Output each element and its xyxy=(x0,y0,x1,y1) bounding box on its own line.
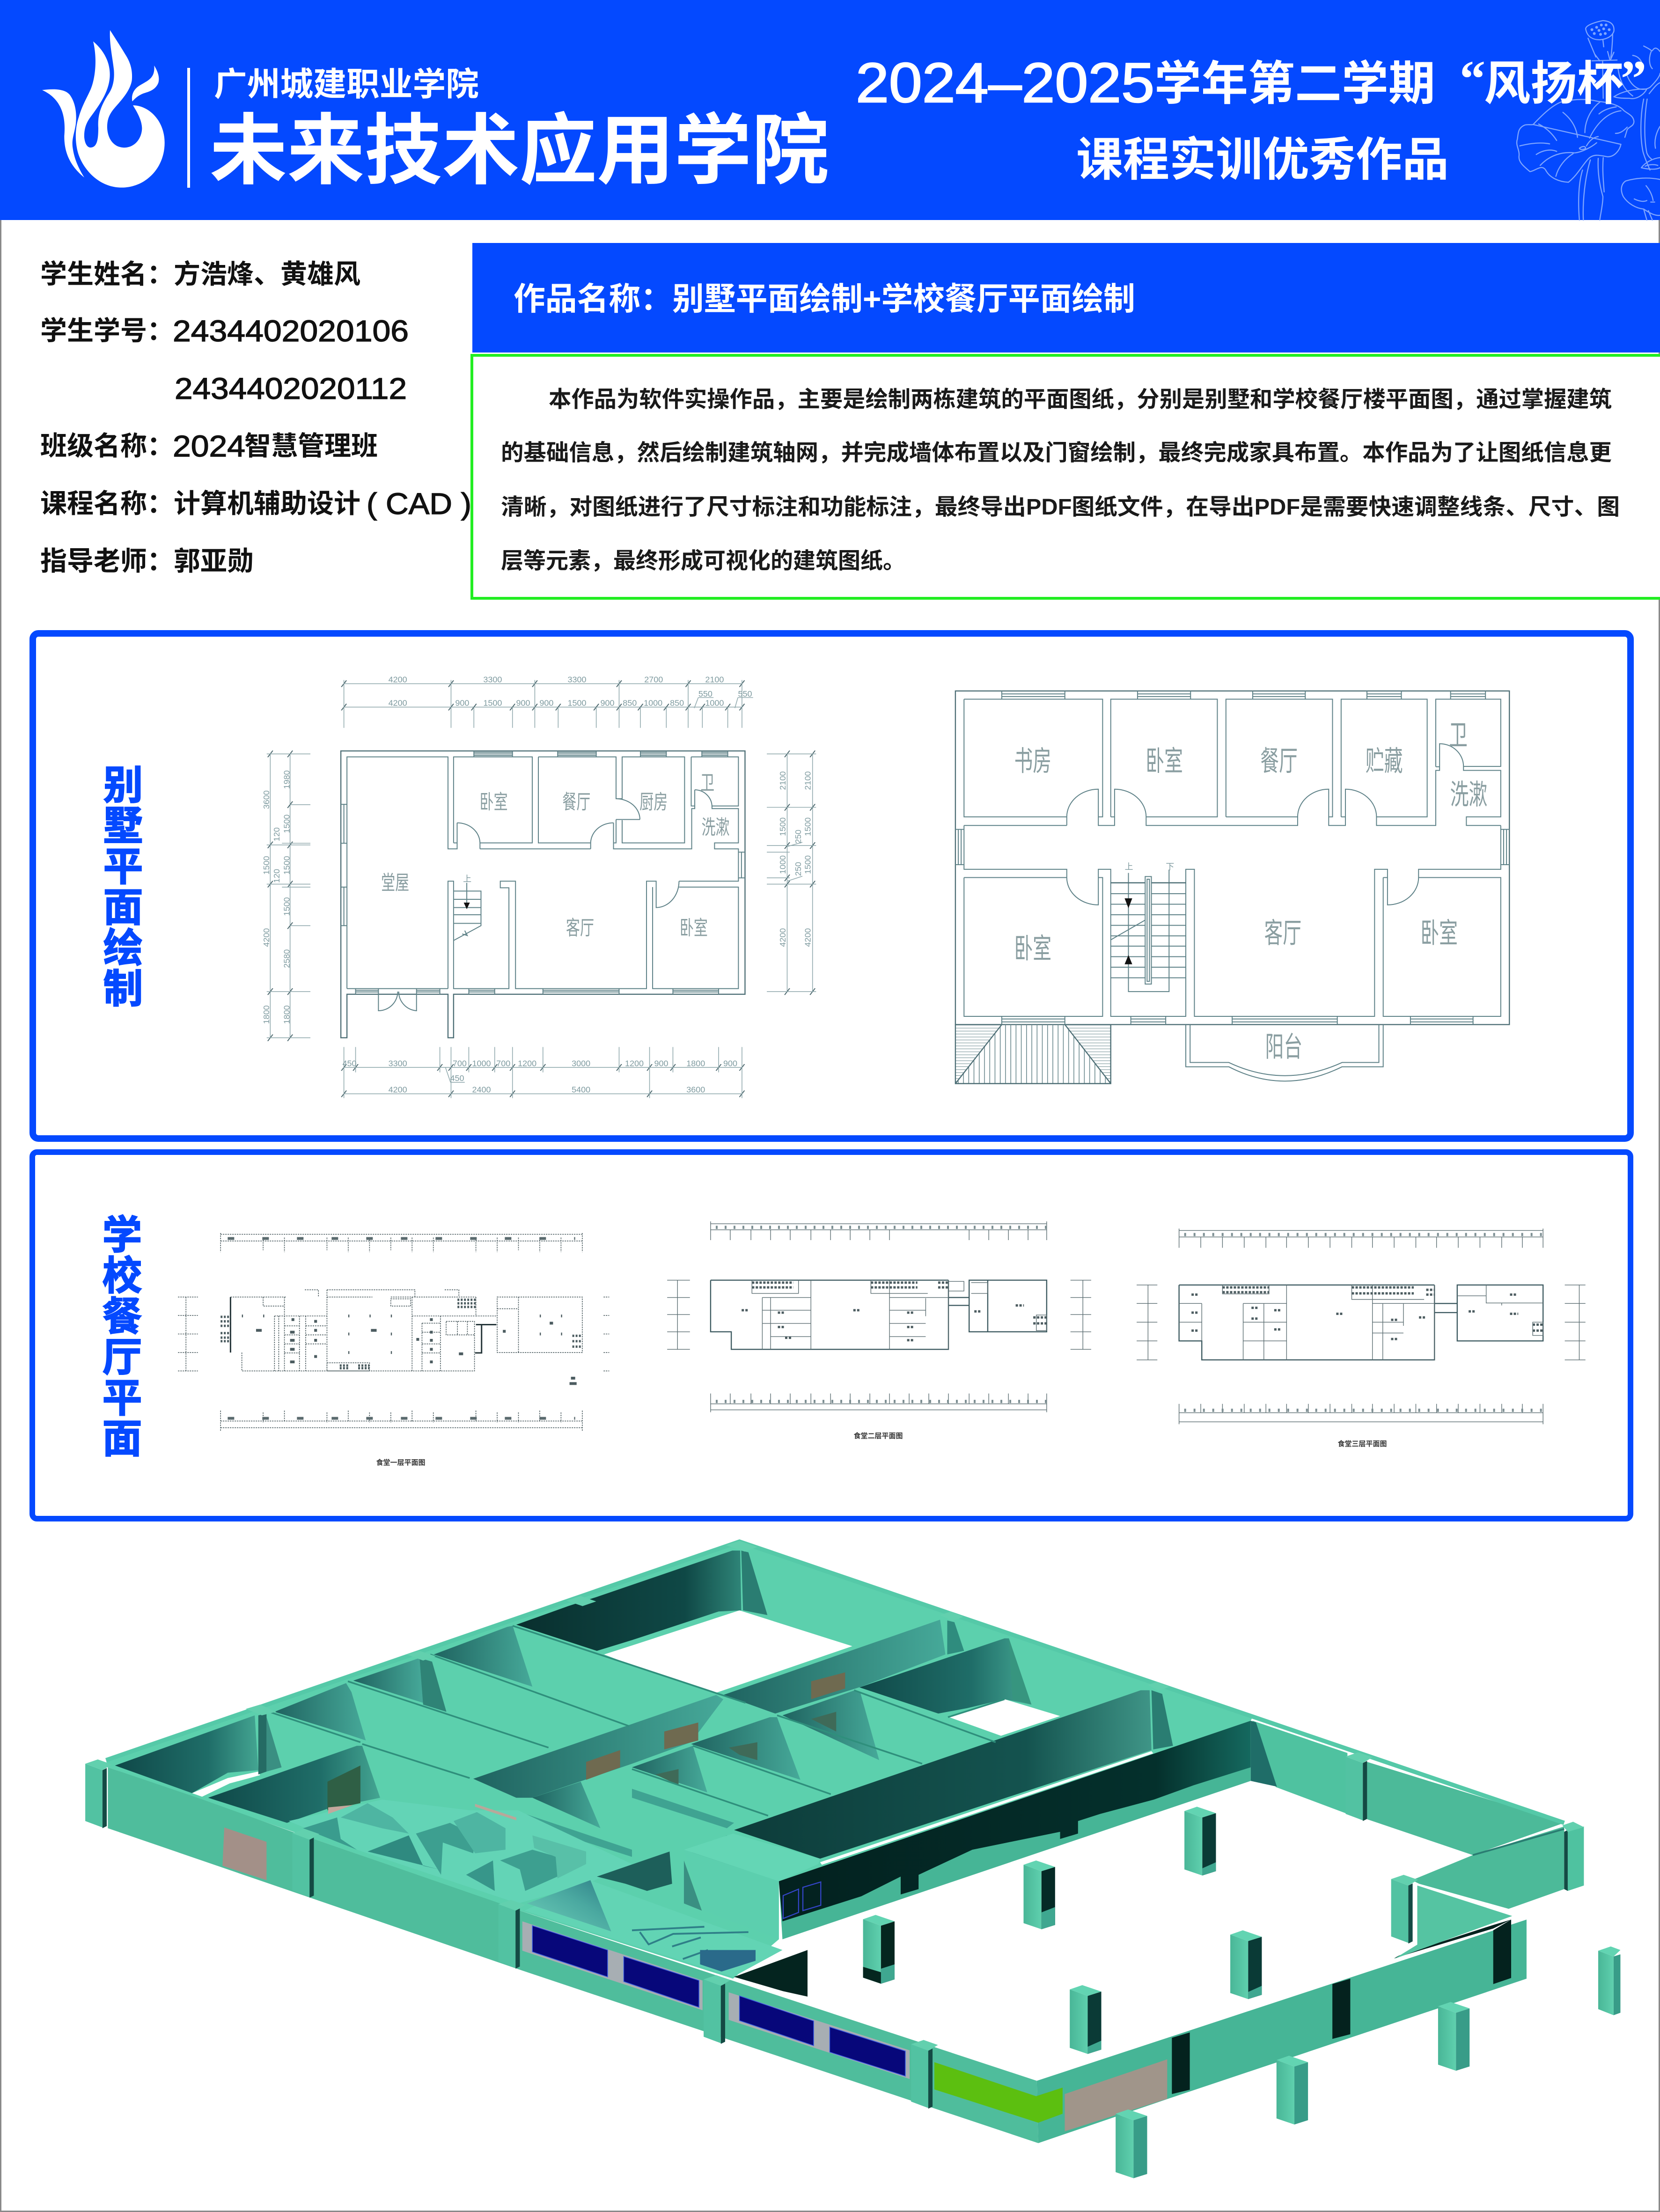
student information list: 课程名称：计算机辅助设计 xyxy=(40,489,360,519)
floor plan: villa second floor: 卧室 xyxy=(1146,745,1183,777)
floor plan: villa first floor: 700 xyxy=(453,1058,467,1068)
model: open courtyards xyxy=(192,1610,1060,1797)
description box: 清晰，对图纸进行了尺寸标注和功能标注，最终导出PDF图纸文件，在导出PDF是需要快速调整线条、尺寸、图 xyxy=(501,495,1620,520)
floor plan: villa first floor: 120 xyxy=(272,827,281,841)
subtitle: 课程实训优秀作品 xyxy=(1076,133,1449,185)
icon: college flame logo xyxy=(42,30,190,188)
floor plan: villa first floor: 1500 xyxy=(282,897,292,916)
model: right L wing xyxy=(1367,1762,1584,1959)
model: ridge bands xyxy=(106,1542,1564,1823)
floor plan: villa first floor: 厨房 xyxy=(639,791,668,813)
floor plan: villa first floor: 2580 xyxy=(282,949,292,968)
work title bar xyxy=(472,243,1660,353)
floor plan: villa first floor: 850 xyxy=(623,698,637,708)
floor plan: villa first floor: 120 xyxy=(272,869,281,883)
floor plan: villa first floor: 1000 xyxy=(778,855,787,874)
award title: 风扬杯 xyxy=(1484,58,1623,110)
floor plan: villa first floor: 卧室 xyxy=(680,917,708,939)
student information list: 2434402020112 xyxy=(175,372,407,405)
header banner xyxy=(0,0,1660,220)
floor plan: villa first floor: 1500 xyxy=(282,815,292,833)
floor plan: canteen level one xyxy=(178,1233,609,1431)
description box: 层等元素，最终形成可视化的建筑图纸。 xyxy=(501,549,905,573)
floor plan: villa first floor: 1800 xyxy=(262,1005,271,1024)
floor plan: villa first floor: 250 xyxy=(793,862,803,876)
floor plan: villa second floor: 下 xyxy=(1166,862,1174,872)
lotus line art xyxy=(1517,21,1660,220)
floor plan: villa second floor: 阳台 xyxy=(1265,1031,1302,1063)
floor plan: villa first floor: 餐厅 xyxy=(562,791,590,813)
floor plan: villa first floor: 3600 xyxy=(262,790,271,809)
floor plan: villa first floor: 4200 xyxy=(389,675,407,684)
floor plan: villa first floor: 堂屋 xyxy=(381,871,409,894)
floor plan: villa first floor: 4200 xyxy=(262,928,271,947)
floor plan: villa first floor: 4200 xyxy=(389,698,407,708)
heading: canteen plan: 校 xyxy=(102,1254,142,1299)
model: wall pilasters xyxy=(85,1541,1418,2109)
floor plan: villa first floor: 2100 xyxy=(778,771,787,790)
floor plan: villa first floor: 3000 xyxy=(572,1058,590,1068)
floor plan: villa second floor: 洗漱 xyxy=(1450,779,1487,810)
floor plan: villa second floor: 贮藏 xyxy=(1366,745,1403,777)
floor plan: villa first floor: 900 xyxy=(539,698,553,708)
floor plan: villa first floor: 2400 xyxy=(472,1085,491,1095)
student information list: 智慧管理班 xyxy=(244,431,378,461)
heading: villa plan: 墅 xyxy=(103,804,143,849)
heading: villa plan: 制 xyxy=(103,967,143,1012)
student information list: ( CAD ) xyxy=(367,487,471,521)
floor plan: villa first floor xyxy=(262,675,816,1098)
floor plan: villa first floor: 1980 xyxy=(282,770,292,789)
model: corner shadow wedge xyxy=(1251,1721,1277,1786)
floor plan: villa first floor: 1500 xyxy=(262,856,271,875)
floor plan: villa first floor: 1000 xyxy=(472,1058,491,1068)
model: back row rooms xyxy=(115,1551,1173,1823)
student information list xyxy=(40,259,471,576)
heading: villa plan: 平 xyxy=(103,845,143,889)
floor plan: canteen level two xyxy=(667,1221,1091,1412)
floor plan: villa first floor: 上 xyxy=(463,875,471,884)
work title bar: 作品名称：别墅平面绘制+学校餐厅平面绘制 xyxy=(514,281,1135,317)
floor plan: villa first floor: 1800 xyxy=(686,1058,705,1068)
floor plan: villa first floor: 3300 xyxy=(483,675,502,684)
model: right upper wall xyxy=(1168,1692,1347,1814)
floor plan: villa first floor: 550 xyxy=(738,689,752,698)
student information list: 学生学号： xyxy=(40,316,174,346)
floor plan: villa first floor: 1500 xyxy=(567,698,586,708)
floor plan: villa first floor: 1000 xyxy=(705,698,724,708)
floor plan: villa first floor: 900 xyxy=(455,698,469,708)
floor plan: villa first floor: 3600 xyxy=(686,1085,705,1095)
floor plan: villa first floor: 550 xyxy=(698,689,712,698)
floor plan: villa second floor: 书房 xyxy=(1014,745,1051,777)
heading: villa plan: 面 xyxy=(103,886,143,930)
heading: canteen plan: 学 xyxy=(102,1213,142,1258)
3D building model xyxy=(85,1541,1620,2178)
model: dark slits on right facade xyxy=(1172,1919,1511,2094)
model: grey door frames xyxy=(222,1828,1167,2131)
floor plan: villa first floor: 1000 xyxy=(644,698,662,708)
floor plan: villa first floor: 2100 xyxy=(803,771,812,790)
school name: 未来技术应用学院 xyxy=(210,108,829,194)
panel: villa floor plans xyxy=(33,633,1631,1139)
floor plan: villa first floor: 1500 xyxy=(483,698,502,708)
floor plan: villa first floor: 1500 xyxy=(778,817,787,836)
floor plan: villa first floor: 450 xyxy=(343,1058,357,1068)
caption: level three: 食堂三层平面图 xyxy=(1337,1440,1387,1448)
floor plan: villa second floor: 餐厅 xyxy=(1260,745,1298,777)
floor plan: villa second floor xyxy=(955,691,1509,1084)
floor plan: villa first floor: 5400 xyxy=(572,1085,590,1095)
student information list: 2434402020106 xyxy=(173,314,409,348)
description box xyxy=(472,355,1660,598)
heading: canteen plan: 平 xyxy=(102,1376,142,1421)
floor plan: villa first floor: 1200 xyxy=(625,1058,644,1068)
floor plan: villa first floor: 卧室 xyxy=(480,791,508,813)
floor plan: villa first floor: 4200 xyxy=(389,1085,407,1095)
floor plan: villa first floor: 1500 xyxy=(803,855,812,874)
model: right facade xyxy=(1037,1919,1527,2143)
award title xyxy=(856,50,1646,114)
floor plan: villa first floor: 洗漱 xyxy=(701,816,730,839)
caption: level one: 食堂一层平面图 xyxy=(376,1458,426,1467)
model: stair room xyxy=(524,1852,808,1997)
heading: villa plan: 别 xyxy=(103,764,143,808)
model: window facade xyxy=(520,1911,1038,2143)
student information list: 2024 xyxy=(173,429,245,463)
model: central corridor wall with doors xyxy=(473,1695,723,1798)
floor plan: villa first floor: 1800 xyxy=(282,1005,292,1024)
floor plan: villa first floor: 卫 xyxy=(700,772,714,794)
floor plan: villa first floor: 3300 xyxy=(389,1058,407,1068)
heading: canteen plan: 餐 xyxy=(102,1295,142,1339)
student information list: 指导老师：郭亚勋 xyxy=(40,546,254,576)
model: long dark wall xyxy=(684,1690,1251,1939)
floor plan: villa first floor: 850 xyxy=(670,698,684,708)
floor plan: villa first floor: 900 xyxy=(723,1058,737,1068)
description box: 的基础信息，然后绘制建筑轴网，并完成墙体布置以及门窗绘制，最终完成家具布置。本作品为了让图纸信息更 xyxy=(501,441,1612,465)
floor plan: villa first floor: 2700 xyxy=(644,675,663,684)
heading: canteen plan: 厅 xyxy=(102,1336,142,1380)
floor plan: villa first floor: 900 xyxy=(516,698,530,708)
model: green glass panel xyxy=(934,2062,1063,2123)
floor plan: villa first floor: 2100 xyxy=(705,675,724,684)
award title: 2024–2025 xyxy=(856,51,1154,114)
heading: villa plan: 绘 xyxy=(103,926,143,971)
award title: ” xyxy=(1621,50,1646,107)
college name: 广州城建职业学院 xyxy=(214,66,479,103)
floor plan: villa first floor: 450 xyxy=(450,1073,464,1083)
floor plan: villa first floor: 客厅 xyxy=(566,917,594,939)
floor plan: villa first floor: 900 xyxy=(654,1058,668,1068)
floor plan: villa first floor: 4200 xyxy=(778,928,787,947)
floor plan: villa second floor: 客厅 xyxy=(1264,918,1301,949)
floor plan: villa first floor: 1500 xyxy=(803,817,812,836)
floor plan: villa second floor: 上 xyxy=(1125,862,1133,872)
floor plan: villa first floor: 3300 xyxy=(567,675,586,684)
floor plan: villa first floor: 700 xyxy=(496,1058,510,1068)
model: floor base xyxy=(106,1542,1252,1979)
floor plan: villa first floor: 1200 xyxy=(518,1058,536,1068)
model: freestanding columns xyxy=(863,1807,1620,2178)
floor plan: villa first floor: 4200 xyxy=(803,928,812,947)
panel: school canteen floor plans xyxy=(32,1152,1631,1519)
model: mid rooms xyxy=(520,1690,879,1877)
model: small rooms cluster xyxy=(289,1800,632,1903)
award title: 学年第二学期 xyxy=(1154,58,1435,110)
student information list: 学生姓名：方浩烽、黄雄风 xyxy=(40,259,360,289)
floor plan: villa first floor: 250 xyxy=(793,830,803,844)
floor plan: villa second floor: 卧室 xyxy=(1014,933,1051,964)
model: floor edge lines xyxy=(269,1626,1005,1815)
model: left facade xyxy=(108,1767,520,1969)
model: navy windows xyxy=(532,1925,905,2076)
floor plan: villa second floor: 卫 xyxy=(1449,720,1468,751)
student information list: 班级名称： xyxy=(40,431,174,461)
heading: canteen plan: 面 xyxy=(102,1417,142,1462)
award title: “ xyxy=(1460,50,1485,107)
floor plan: villa first floor: 1500 xyxy=(282,856,292,875)
floor plan: canteen level three xyxy=(1137,1228,1586,1424)
floor plan: villa first floor: 900 xyxy=(601,698,615,708)
caption: level two: 食堂二层平面图 xyxy=(853,1432,903,1440)
floor plan: villa second floor: 卧室 xyxy=(1420,918,1458,949)
description box: 本作品为软件实操作品，主要是绘制两栋建筑的平面图纸，分别是别墅和学校餐厅楼平面图，通过掌握建筑 xyxy=(549,387,1612,412)
